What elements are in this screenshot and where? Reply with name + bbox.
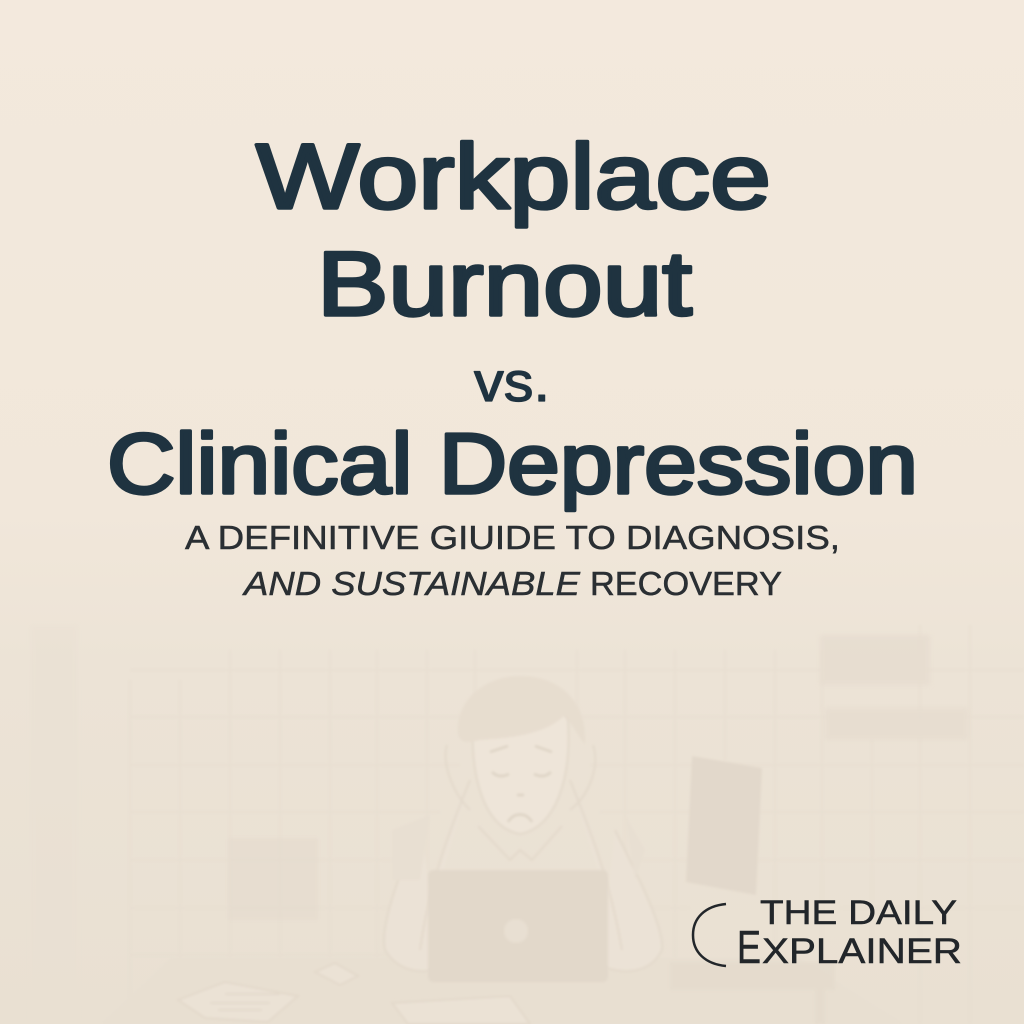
left filing box bbox=[228, 838, 318, 920]
hair bbox=[458, 676, 585, 745]
brows eyes mouth bbox=[490, 746, 552, 822]
logo large E: E bbox=[737, 921, 761, 973]
title bbox=[107, 126, 918, 512]
logo line: THE DAILY: THE DAILY bbox=[760, 894, 957, 932]
title line: vs.: vs. bbox=[474, 350, 550, 413]
hands at head bbox=[446, 745, 595, 810]
laptop bbox=[428, 870, 608, 982]
title line: Clinical Depression: Clinical Depression bbox=[107, 417, 918, 512]
small card bbox=[315, 963, 358, 985]
wall tile grid bbox=[130, 625, 1024, 1024]
subtitle line 2 italic part: AND SUSTAINABLE bbox=[242, 565, 581, 602]
front paper bbox=[392, 996, 530, 1024]
left wall column bbox=[30, 625, 78, 1024]
upper right shelf bbox=[820, 635, 930, 685]
subtitle bbox=[185, 519, 840, 602]
logo arc bbox=[693, 904, 726, 966]
title line: Workplace: Workplace bbox=[256, 126, 771, 228]
torso and arms bbox=[384, 780, 662, 971]
desk surface bbox=[100, 958, 905, 1024]
logo: The Daily Explainer bbox=[693, 894, 962, 973]
subtitle line 2 upright part: RECOVERY bbox=[590, 565, 782, 602]
face bbox=[473, 698, 569, 834]
paper stack bbox=[178, 982, 298, 1022]
laptop logo bbox=[504, 919, 528, 943]
faded office scene bbox=[30, 625, 1024, 1024]
collar bbox=[478, 826, 562, 860]
title line: Burnout: Burnout bbox=[317, 234, 692, 335]
monitor bbox=[686, 756, 762, 895]
subtitle line 1: A DEFINITIVE GIUIDE TO DIAGNOSIS, bbox=[185, 519, 840, 556]
chair back bbox=[392, 815, 645, 880]
monitor stand bbox=[670, 962, 835, 1024]
logo line: XPLAINER: XPLAINER bbox=[762, 932, 962, 971]
lower right shelf bbox=[825, 708, 968, 740]
stressed person bbox=[384, 676, 662, 971]
